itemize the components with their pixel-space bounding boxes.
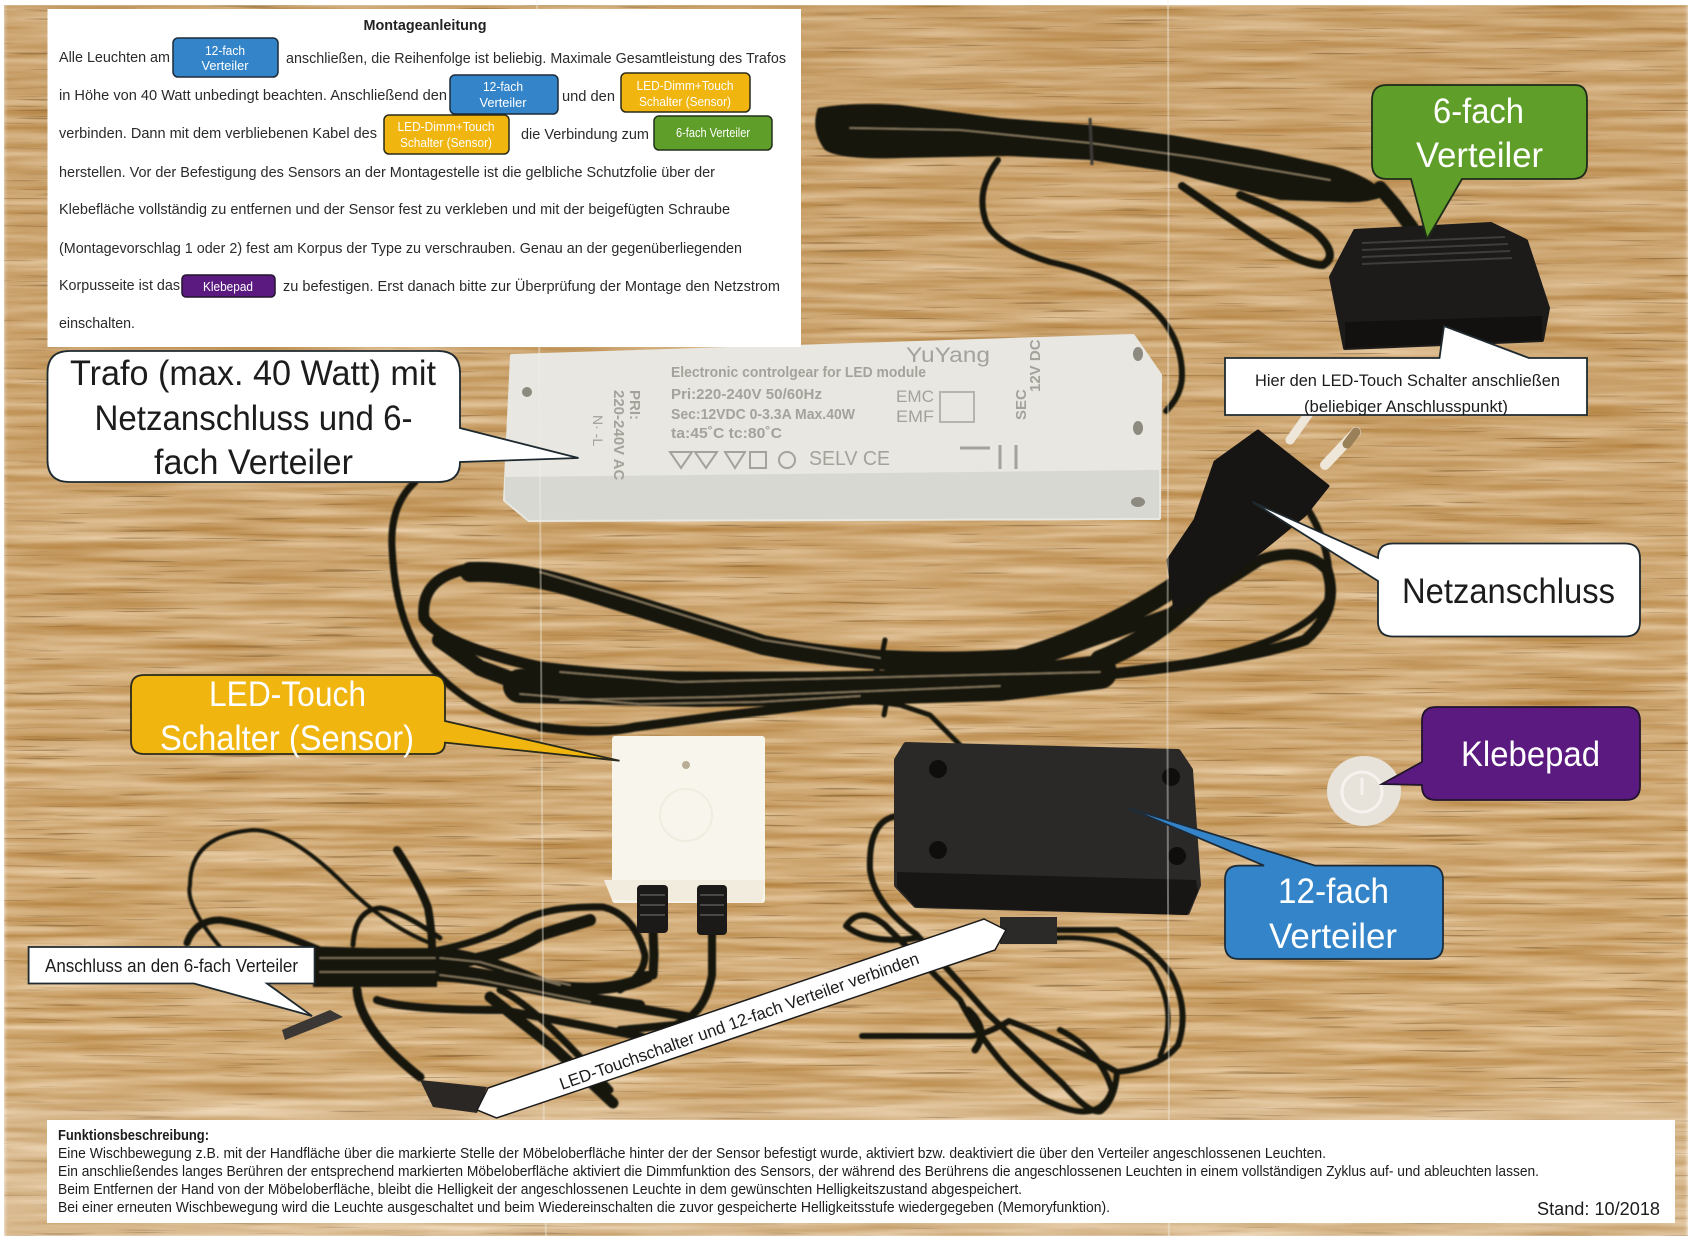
instruction body text: Korpusseite ist das xyxy=(59,277,180,294)
arrow: LED-Touchschalter und 12-fach Verteiler verbinden xyxy=(477,919,1006,1118)
panel: Funktionsbeschreibung xyxy=(47,1120,1675,1223)
callout: 12-fach Verteiler: Verteiler xyxy=(1269,917,1397,956)
instruction body text: anschließen, die Reihenfolge ist beliebig. Maximale Gesamtleistung des Trafos xyxy=(286,50,786,67)
function description text xyxy=(58,1146,1539,1216)
callout: LED-Touch Schalter Anschluss: (beliebiger Anschlusspunkt) xyxy=(1304,397,1508,416)
callout: Trafo: Trafo (max. 40 Watt) mit xyxy=(70,354,436,393)
photo: transformer mains cable, top coil xyxy=(815,104,1412,411)
transformer label text: SELV CE xyxy=(809,448,890,470)
heading: Montageanleitung: Montageanleitung xyxy=(364,17,486,34)
callout: Anschluss an den 6-fach Verteiler xyxy=(29,947,315,1016)
transformer label text: N· -L xyxy=(590,415,606,446)
instruction body text: verbinden. Dann mit dem verbliebenen Kabel des xyxy=(59,125,377,142)
chip: 12-fach Verteiler xyxy=(173,38,278,77)
callout: LED-Touch Schalter Anschluss xyxy=(1225,326,1587,416)
instruction body text: (Montagevorschlag 1 oder 2) fest am Korpus der Type zu verschrauben. Genau an der gegenüberliegenden xyxy=(59,240,742,257)
chip: LED-Dimm+Touch Schalter (Sensor): LED-Dimm+Touch xyxy=(636,78,734,93)
transformer label text: 12V DC xyxy=(1027,339,1044,392)
function description text: Beim Entfernen der Hand von der Möbeloberfläche, bleibt die Helligkeit der angeschlossenen Leuchte in dem gewünschten Helligkeitszustand abgespeichert. xyxy=(58,1182,1022,1198)
date stamp: Stand: 10/2018 xyxy=(1537,1199,1660,1219)
photo: white touch sensor xyxy=(604,736,765,903)
transformer label text: Sec:12VDC 0-3.3A Max.40W xyxy=(671,406,856,423)
callout: Anschluss an den 6-fach Verteiler: Anschluss an den 6-fach Verteiler xyxy=(45,956,298,976)
function description text: Eine Wischbewegung z.B. mit der Handfläche über die markierte Stelle der Möbeloberfläche hinter der der Sensor befestigt wurde, aktiviert bzw. deaktiviert die über den Verteiler angeschlossenen Leuchten. xyxy=(58,1146,1326,1162)
instruction body text: Klebefläche vollständig zu entfernen und der Sensor fest zu verkleben und mit der beigefügten Schraube xyxy=(59,201,730,218)
function description text: Bei einer erneuten Wischbewegung wird die Leuchte ausgeschaltet und beim Wiedereinschalten die zuvor gespeicherte Helligkeitsstufe wiedergegeben (Memoryfunktion). xyxy=(58,1200,1110,1216)
callout: LED-Touch Schalter (Sensor): LED-Touch xyxy=(209,675,366,714)
chip: Klebepad: Klebepad xyxy=(203,279,253,294)
callout: 12-fach Verteiler xyxy=(1128,808,1443,959)
instruction body text: einschalten. xyxy=(59,315,135,332)
photo: mains plug xyxy=(1168,412,1356,610)
instruction body text: in Höhe von 40 Watt unbedingt beachten. Anschließend den xyxy=(59,87,447,104)
chip: Klebepad xyxy=(182,275,275,297)
transformer label text xyxy=(590,339,1044,480)
callout: Trafo: Netzanschluss und 6- xyxy=(94,399,412,438)
chip: LED-Dimm+Touch Schalter (Sensor): Schalter (Sensor) xyxy=(639,94,731,109)
photo: sensor cable tangle xyxy=(187,830,712,1103)
callout: 6-fach Verteiler: Verteiler xyxy=(1416,136,1543,175)
callout: 6-fach Verteiler: 6-fach xyxy=(1433,92,1524,131)
photo: main power cable bundle xyxy=(392,482,1331,745)
function description text: Ein anschließendes langes Berühren der entsprechend markierten Möbeloberfläche aktiviert die Dimmfunktion des Sensors, der während des Berührens die angeschlossenen Leuchten in einem vollständigen Zyklus auf- und ableuchten lassen. xyxy=(58,1164,1539,1180)
callout: Trafo xyxy=(48,351,578,482)
chip: 6-fach Verteiler: 6-fach Verteiler xyxy=(676,125,751,140)
callout: Netzanschluss: Netzanschluss xyxy=(1402,572,1615,611)
callout: Klebepad xyxy=(1382,707,1640,800)
callout: 12-fach Verteiler: 12-fach xyxy=(1278,872,1389,911)
instruction body text: die Verbindung zum xyxy=(521,126,649,143)
chip: LED-Dimm+Touch Schalter (Sensor): Schalter (Sensor) xyxy=(400,135,492,150)
photo: sensor plug connectors xyxy=(637,885,727,935)
panel: Montageanleitung assembly instructions xyxy=(48,9,801,347)
photo: lower cable plug xyxy=(420,1080,487,1113)
transformer label text: EMC xyxy=(896,387,934,406)
transformer label text: PRI: xyxy=(626,390,643,420)
chip: 12-fach Verteiler xyxy=(450,75,558,114)
transformer label text: YuYang xyxy=(906,344,990,367)
chip: LED-Dimm+Touch Schalter (Sensor) xyxy=(621,73,750,112)
callout: Netzanschluss xyxy=(1252,502,1640,636)
callout: LED-Touch Schalter (Sensor) xyxy=(131,675,620,761)
callout: LED-Touch Schalter (Sensor): Schalter (Sensor) xyxy=(160,719,414,758)
instruction body text xyxy=(59,49,786,332)
transformer label text: SEC xyxy=(1013,389,1030,420)
photo: 6-way distributor box xyxy=(1331,224,1548,348)
instruction body text: und den xyxy=(562,88,615,105)
chip: 12-fach Verteiler: Verteiler xyxy=(202,58,249,73)
instruction body text: zu befestigen. Erst danach bitte zur Überprüfung der Montage den Netzstrom xyxy=(283,277,780,295)
transformer label text: ta:45˚C tc:80˚C xyxy=(671,425,782,442)
transformer label text: Pri:220-240V 50/60Hz xyxy=(671,386,822,403)
callout: LED-Touch Schalter Anschluss: Hier den LED-Touch Schalter anschließen xyxy=(1255,371,1560,390)
callout: Klebepad: Klebepad xyxy=(1461,735,1600,774)
chip: 12-fach Verteiler: Verteiler xyxy=(480,95,527,110)
chip: 12-fach Verteiler: 12-fach xyxy=(205,43,245,58)
transformer label text: Electronic controlgear for LED module xyxy=(671,364,926,381)
callout: Trafo: fach Verteiler xyxy=(154,443,353,482)
chip: LED-Dimm+Touch Schalter (Sensor) xyxy=(384,115,509,154)
instruction body text: herstellen. Vor der Befestigung des Sensors an der Montagestelle ist die gelbliche Schutzfolie über der xyxy=(59,164,715,181)
photo: 12-way distributor cable xyxy=(846,816,1183,1111)
heading: Funktionsbeschreibung: Funktionsbeschreibung: xyxy=(58,1128,209,1144)
instruction body text: Alle Leuchten am xyxy=(59,49,170,66)
arrow: LED-Touchschalter und 12-fach Verteiler verbinden: LED-Touchschalter und 12-fach Verteiler verbinden xyxy=(557,949,922,1094)
callout: 6-fach Verteiler xyxy=(1372,85,1587,239)
paper fold lines xyxy=(537,0,1169,1236)
chip: 6-fach Verteiler xyxy=(654,116,772,150)
photo: adhesive pad with power symbol xyxy=(1327,756,1401,826)
photo: 12-way distributor box xyxy=(897,745,1198,944)
photo: LED transformer xyxy=(505,336,1160,520)
transformer label text: 220-240V AC xyxy=(610,390,627,480)
chip: 12-fach Verteiler: 12-fach xyxy=(483,79,523,94)
chip: LED-Dimm+Touch Schalter (Sensor): LED-Dimm+Touch xyxy=(398,119,494,134)
transformer label text: EMF xyxy=(896,407,934,426)
photo: connector at cable end xyxy=(282,1010,343,1040)
